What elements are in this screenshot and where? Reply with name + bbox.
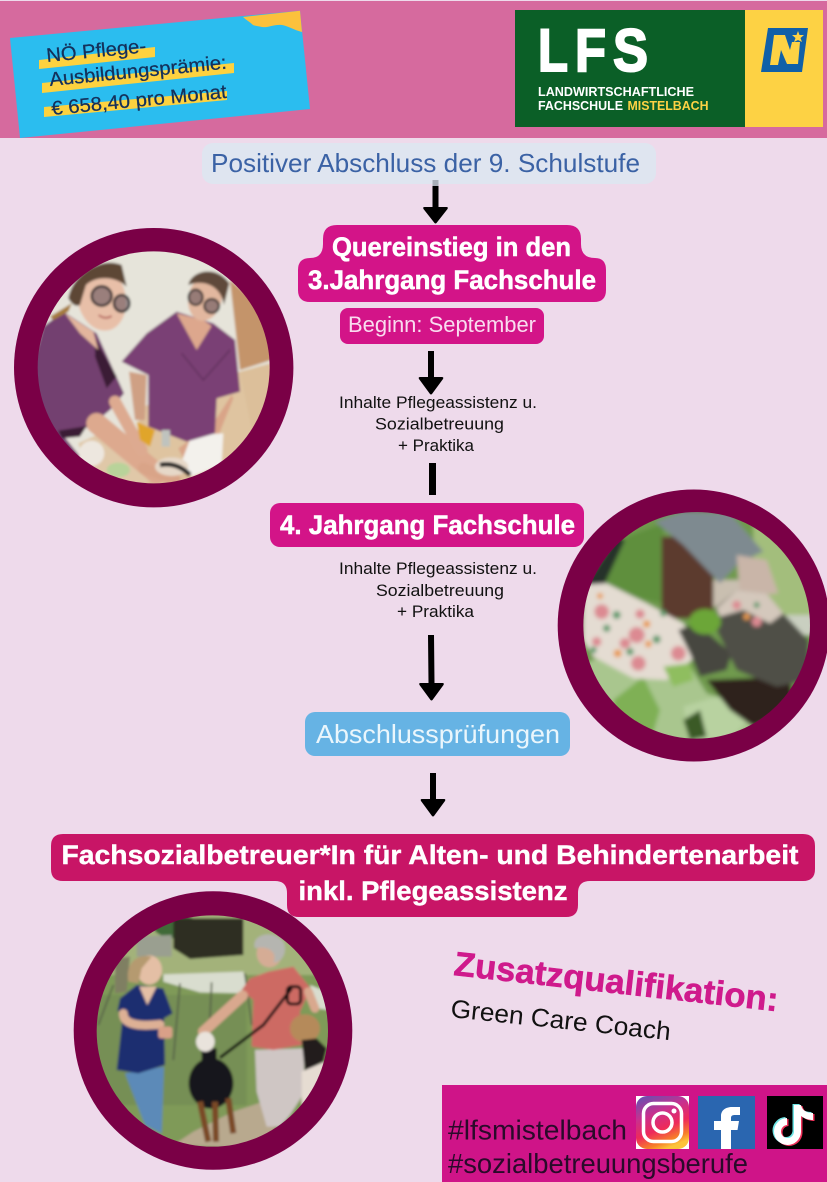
text: contents year 3: [339, 394, 537, 455]
heading: Quereinstieg: Quereinstieg in den: [332, 232, 571, 262]
logo: LFS Mistelbach: [515, 10, 823, 127]
icon: Instagram: [636, 1096, 689, 1149]
text: additional qualification: Green Care Coach: [449, 995, 672, 1046]
heading: 4. Jahrgang: 4. Jahrgang Fachschule: [280, 510, 575, 540]
logo: LFS Mistelbach: LANDWIRTSCHAFTLICHE: [538, 85, 694, 99]
heading: Quereinstieg: 3.Jahrgang Fachschule: [308, 265, 596, 295]
logo: LFS Mistelbach: FACHSCHULE: [538, 99, 623, 113]
heading: qualification: Fachsozialbetreuer*In für Alten- und Behindertenarbeit: [62, 840, 799, 870]
training props: [137, 422, 155, 447]
text: contents year 3: Sozialbetreuung: [375, 416, 504, 434]
text: contents year 3: Inhalte Pflegeassistenz u.: [339, 394, 537, 412]
panel: social media: [442, 1085, 827, 1182]
arrow 4: [421, 773, 445, 816]
logo: LFS Mistelbach: F: [575, 17, 606, 84]
left person: [33, 312, 124, 460]
text: contents year 4: + Praktika: [397, 603, 475, 621]
right person: [129, 372, 147, 420]
icon: TikTok: [767, 1096, 823, 1149]
arrow 1: [423, 180, 448, 224]
callout: Ausbildungsprämie banner: NÖ Pflege-: [45, 35, 147, 67]
older woman: [255, 1048, 305, 1127]
callout: Ausbildungsprämie banner: [10, 11, 310, 138]
entry requirement pill: Positiver Abschluss der 9. Schulstufe: [211, 148, 640, 178]
hashtags: [448, 1114, 748, 1179]
callout: Ausbildungsprämie banner: Ausbildungsprämie:: [48, 52, 228, 91]
arrow 3: [419, 635, 444, 700]
connector line: [429, 463, 436, 495]
exams pill: Abschlussprüfungen: [316, 719, 560, 749]
photo: nursing students: [14, 228, 293, 507]
exams pill: [305, 712, 570, 756]
heading: 4. Jahrgang: [270, 503, 584, 547]
logo: LFS Mistelbach: MISTELBACH: [628, 99, 708, 113]
hashtags: #lfsmistelbach: [448, 1114, 627, 1146]
heading: qualification: inkl. Pflegeassistenz: [298, 876, 568, 906]
young woman: [137, 955, 162, 985]
text: contents year 4: [339, 560, 537, 621]
text: contents year 4: Inhalte Pflegeassistenz u.: [339, 560, 537, 578]
entry requirement pill: [202, 143, 656, 184]
goat: [189, 1058, 233, 1109]
logo: LFS Mistelbach: L: [538, 17, 568, 84]
heading: qualification: [51, 834, 815, 917]
photo: gardening gloves: [558, 490, 827, 762]
callout: Ausbildungsprämie banner: € 658,40 pro Monat: [50, 81, 228, 120]
text: contents year 4: Sozialbetreuung: [376, 582, 504, 600]
icon: Facebook: [698, 1096, 755, 1149]
hashtags: #sozialbetreuungsberufe: [448, 1148, 748, 1179]
start date pill: [340, 308, 544, 344]
logo: LFS Mistelbach: S: [613, 17, 648, 84]
dog: [290, 1014, 320, 1042]
text: contents year 3: + Praktika: [398, 437, 475, 455]
heading: Quereinstieg: [298, 225, 606, 302]
header band: [0, 1, 827, 138]
photo: walking with goat: [74, 891, 352, 1170]
text: additional qualification: Zusatzqualifikation:: [452, 945, 780, 1019]
start date pill: Beginn: September: [348, 312, 536, 337]
arrow 2: [419, 351, 443, 394]
